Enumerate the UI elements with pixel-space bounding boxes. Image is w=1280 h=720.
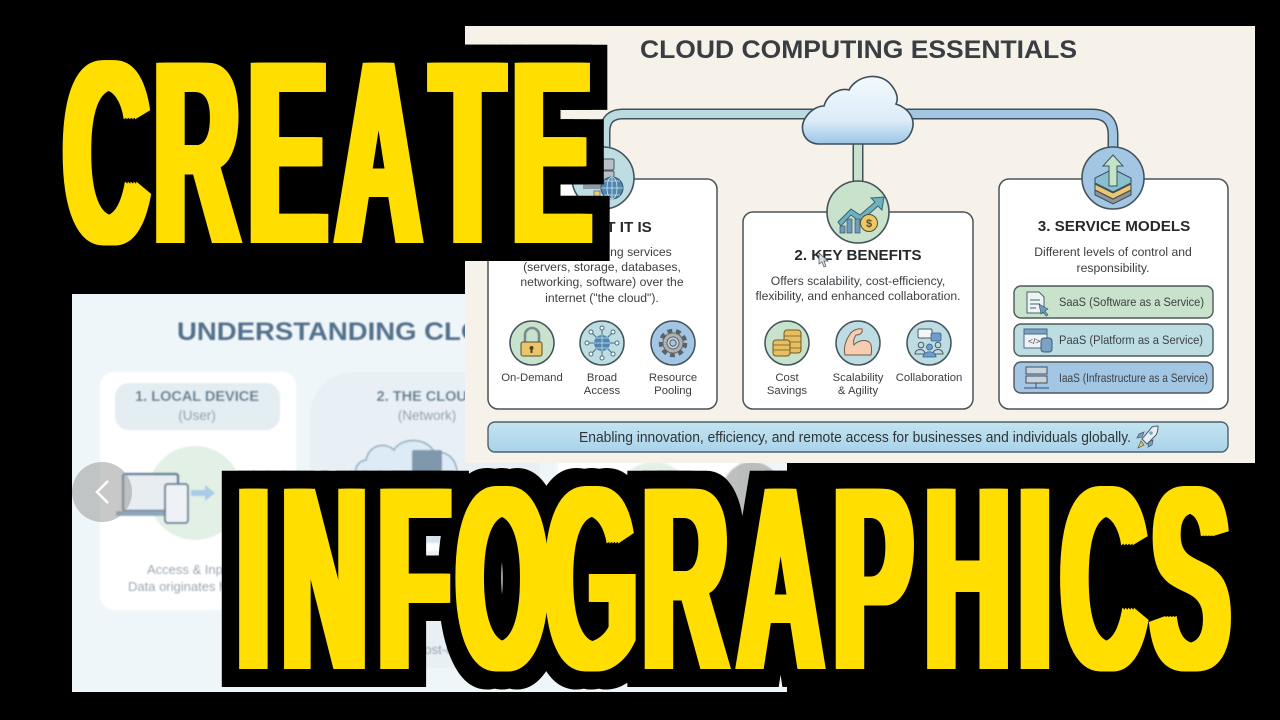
label: on-demand: On-Demand bbox=[501, 372, 563, 384]
headline halo: create bbox=[49, 7, 606, 300]
heading: service models: 3. SERVICE MODELS bbox=[1038, 218, 1190, 235]
panel: cloud computing essentials bbox=[465, 26, 1255, 463]
card: service models bbox=[999, 147, 1228, 409]
card: the cloud: 2. THE CLOUD bbox=[377, 389, 477, 405]
card: the cloud: (Network) bbox=[398, 408, 456, 423]
card: local device: Data originates here bbox=[128, 579, 245, 594]
label: collaboration: Collaboration bbox=[896, 372, 962, 384]
text: definition: networking, software) over the bbox=[520, 275, 684, 289]
label: cost savings bbox=[767, 372, 807, 397]
row: PaaS: </> bbox=[1028, 336, 1040, 346]
icon: mouse cursor bbox=[819, 253, 828, 267]
headline halo: infographics bbox=[222, 433, 1245, 720]
icon: cloud bbox=[802, 76, 913, 144]
row: SaaS: SaaS (Software as a Service) bbox=[1059, 295, 1204, 309]
icon: collaboration people bbox=[907, 321, 951, 365]
icon: broad access network bbox=[580, 321, 624, 365]
row: PaaS bbox=[1014, 324, 1213, 356]
card: third column remnants bbox=[558, 463, 738, 478]
icon: rocket bbox=[1137, 426, 1158, 448]
button: previous arrow bbox=[72, 462, 132, 522]
headline: infographics: INFOGRAPHICS bbox=[237, 433, 1230, 720]
text: benefits description bbox=[755, 274, 961, 303]
connector: left pipe bbox=[605, 114, 815, 150]
icon: on-demand lock bbox=[510, 321, 554, 365]
card: local device: 1. LOCAL DEVICE bbox=[135, 389, 259, 405]
card: local device: (User) bbox=[178, 408, 216, 423]
label: scalability and agility: Scalability bbox=[833, 372, 884, 384]
card: the cloud: Cost-effective bbox=[415, 642, 494, 657]
heading: key benefits: 2. KEY BENEFITS bbox=[794, 247, 922, 264]
icon: layers with up arrow bbox=[1082, 147, 1144, 209]
card: the cloud bbox=[354, 390, 465, 656]
banner: closing statement bbox=[488, 422, 1228, 452]
row: PaaS: PaaS (Platform as a Service) bbox=[1059, 333, 1203, 347]
text: service models description: responsibility. bbox=[1077, 261, 1149, 275]
row: SaaS bbox=[1014, 286, 1213, 318]
label: broad access: Access bbox=[584, 385, 621, 397]
banner: closing statement: Enabling innovation, efficiency, and remote access for businesses and individuals globally. bbox=[579, 430, 1131, 446]
icon: resource pooling gear bbox=[651, 321, 695, 365]
button: next arrow bbox=[725, 463, 774, 516]
card: what it is bbox=[488, 147, 717, 409]
card: local device bbox=[100, 372, 296, 610]
heading: what it is: 1. WHAT IT IS bbox=[554, 219, 652, 236]
icon: cost savings coins bbox=[765, 321, 809, 365]
icon: growth chart and coin bbox=[827, 181, 889, 243]
text: definition bbox=[520, 245, 684, 305]
black block under top panel bbox=[787, 463, 1280, 720]
label: scalability and agility: & Agility bbox=[838, 385, 878, 397]
connector: right pipe bbox=[905, 114, 1113, 150]
headline: create: CREATE bbox=[64, 7, 591, 300]
label: cost savings: Savings bbox=[767, 385, 807, 397]
card: local device: Access & Input bbox=[147, 562, 234, 577]
heading: understanding cloud: UNDERSTANDING CLOUD bbox=[177, 318, 522, 346]
text: benefits description: Offers scalability, cost-efficiency, bbox=[771, 274, 945, 288]
connector: centre pipe bbox=[852, 140, 864, 185]
panel: understanding cloud slide bbox=[72, 294, 787, 692]
label: scalability and agility bbox=[833, 372, 884, 397]
card: key benefits bbox=[743, 181, 973, 409]
text: benefits description: flexibility, and enhanced collaboration. bbox=[755, 289, 961, 303]
label: broad access bbox=[584, 372, 621, 397]
label: broad access: Broad bbox=[587, 372, 617, 384]
text: service models description bbox=[1034, 245, 1192, 275]
text: definition: (servers, storage, databases, bbox=[523, 260, 681, 274]
text: definition: internet ("the cloud"). bbox=[545, 291, 659, 305]
icon: server and globe bbox=[572, 147, 634, 209]
row: IaaS bbox=[1014, 362, 1213, 393]
row: IaaS: IaaS (Infrastructure as a Service) bbox=[1059, 371, 1208, 385]
label: cost savings: Cost bbox=[775, 372, 799, 384]
title: CLOUD COMPUTING ESSENTIALS bbox=[640, 36, 1077, 64]
icon: growth chart and coin: $ bbox=[866, 218, 872, 230]
label: resource pooling: Resource bbox=[649, 372, 697, 384]
label: resource pooling bbox=[649, 372, 697, 397]
label: resource pooling: Pooling bbox=[654, 385, 692, 397]
text: definition: Cloud computing services bbox=[532, 245, 672, 259]
icon: scalability flexed arm bbox=[836, 321, 880, 365]
text: service models description: Different levels of control and bbox=[1034, 245, 1192, 259]
